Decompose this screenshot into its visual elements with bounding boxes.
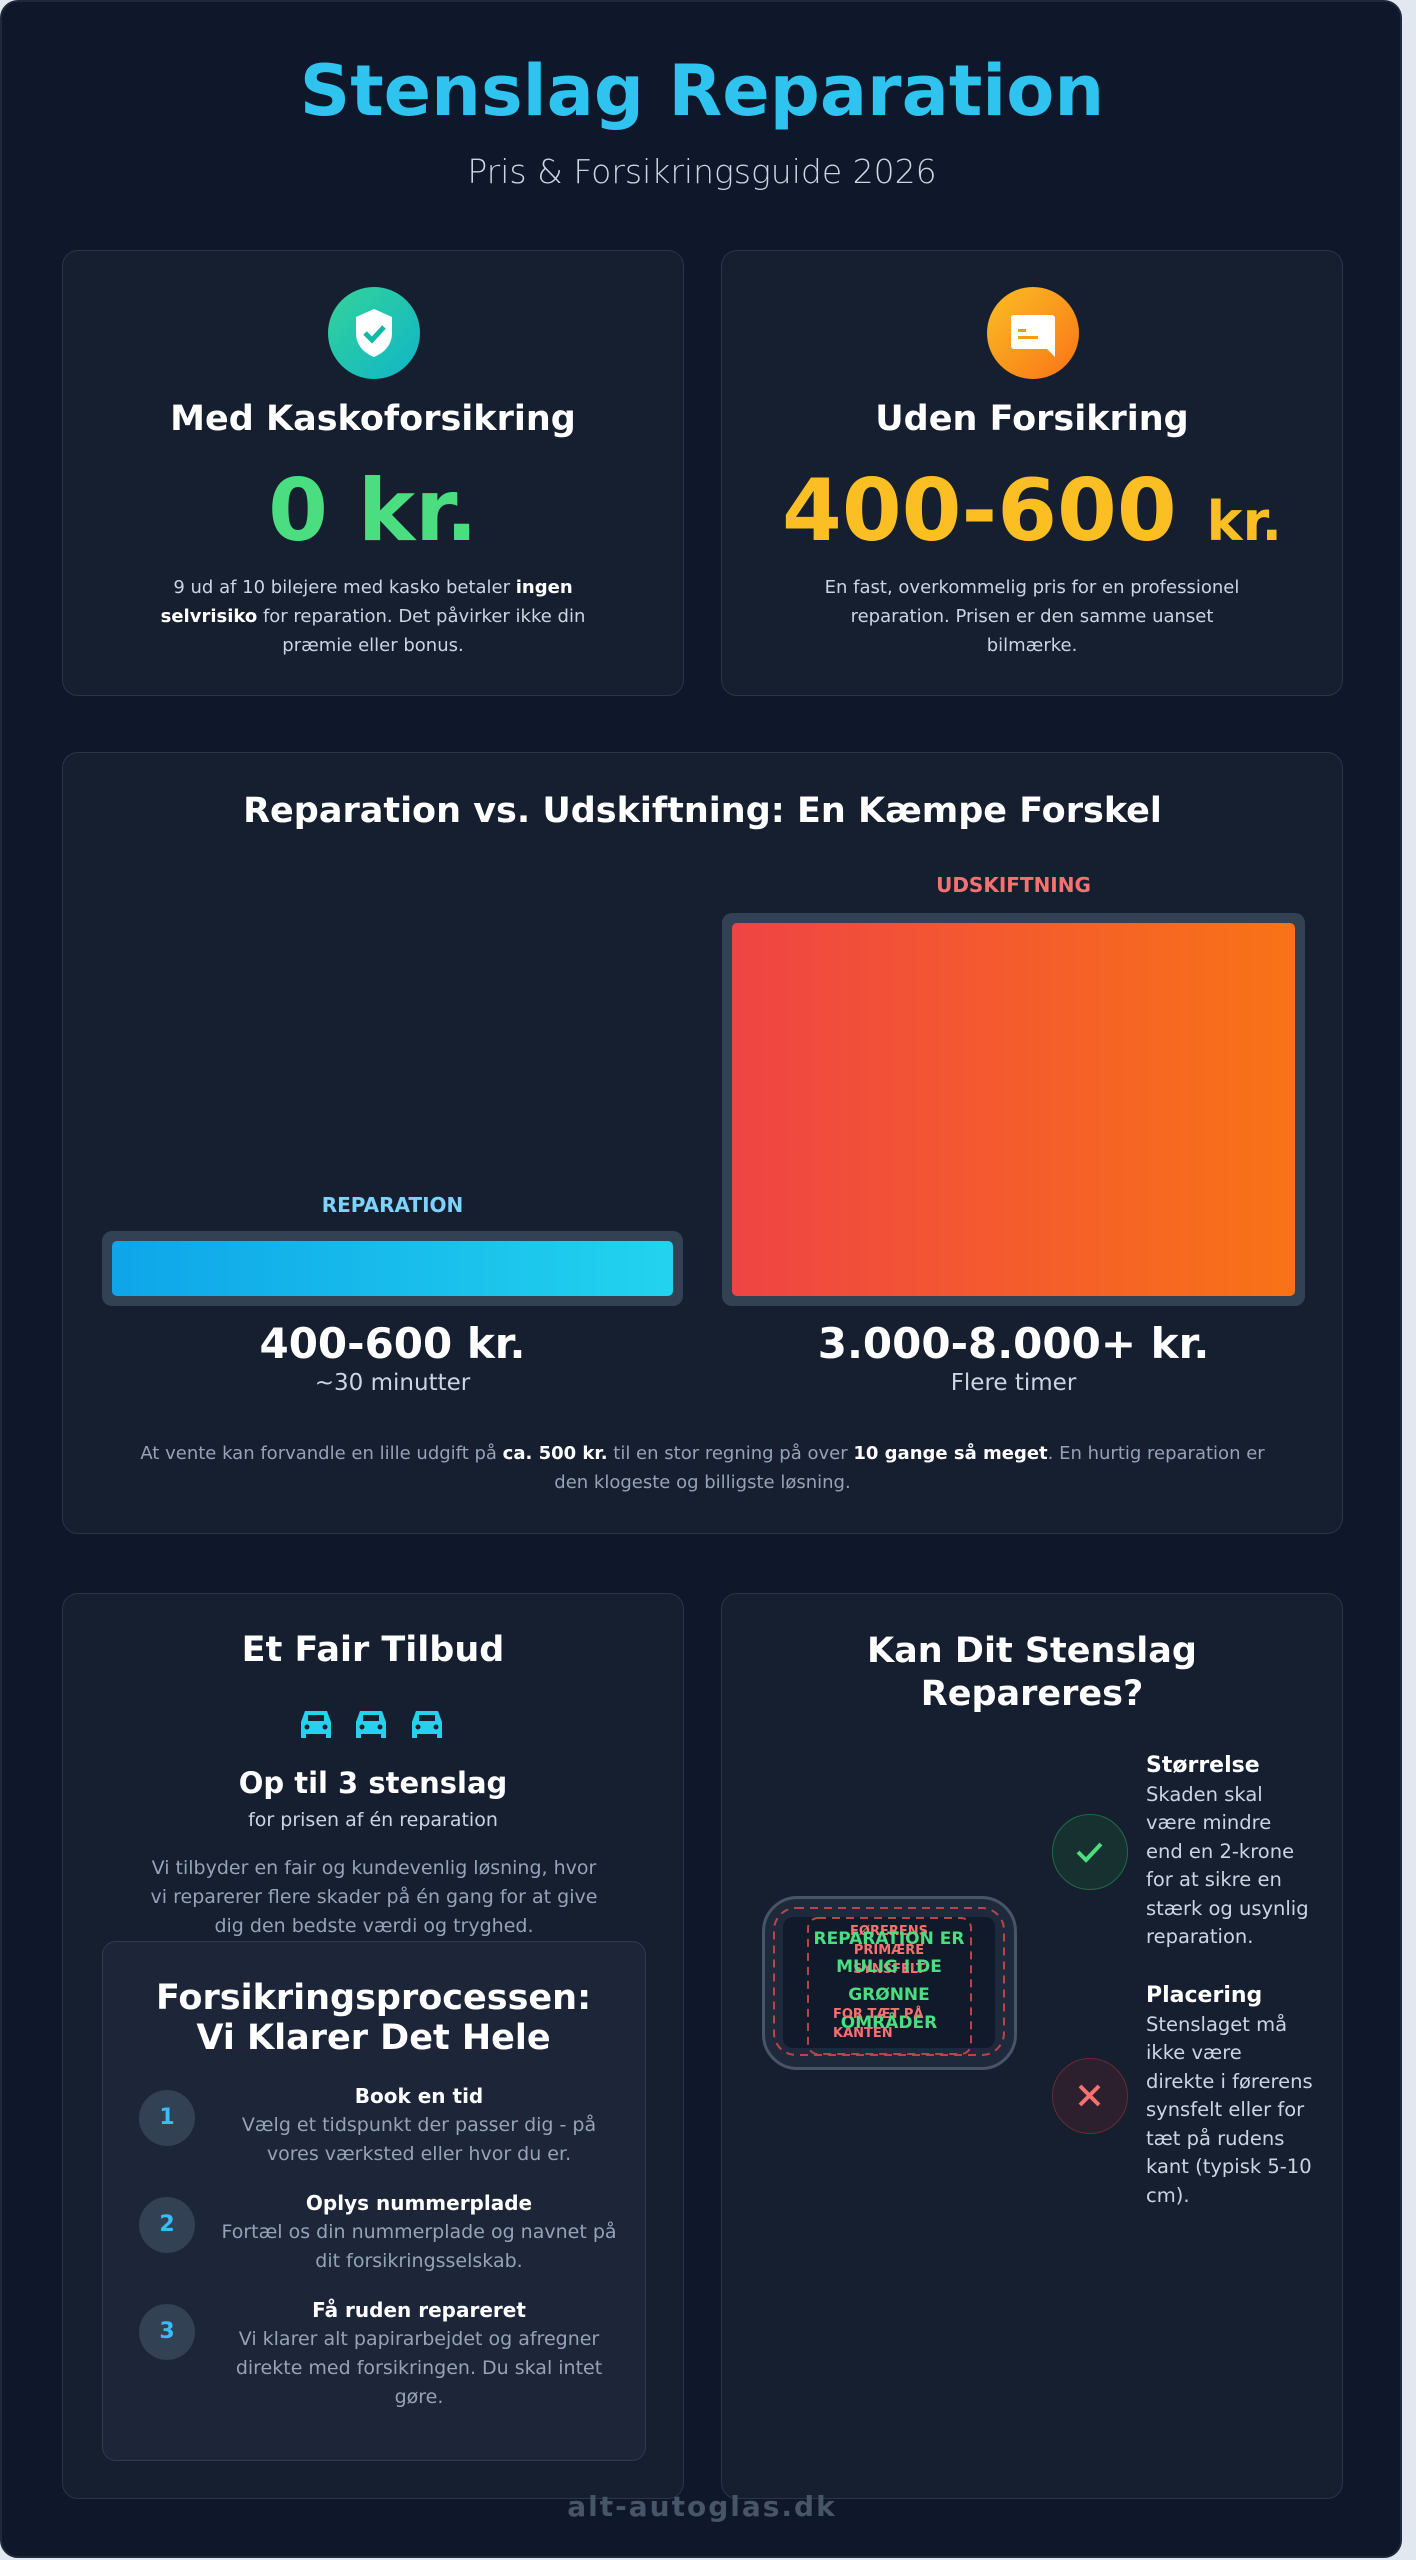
description: 9 ud af 10 bilejere med kasko betaler ingen selvrisiko for reparation. Det påvirker ikke din præmie eller bonus. (161, 577, 585, 656)
windshield diagram: REPARATION ER (814, 1929, 964, 1949)
step 3: Vi klarer alt papirarbejdet og afregner direkte med forsikringen. Du skal intet gøre. (236, 2328, 602, 2408)
value: reparation: ~30 minutter (315, 1370, 470, 1396)
price: 400-600 kr. (782, 461, 1282, 561)
text: placement: Placering (1146, 1983, 1262, 2008)
title: Stenslag Reparation (300, 50, 1104, 132)
value: udskiftning: 3.000-8.000+ kr. (818, 1319, 1209, 1368)
step 1: 1 (159, 2105, 175, 2130)
value: udskiftning: Flere timer (951, 1370, 1076, 1396)
panel: with insurance (62, 250, 684, 696)
panel: without insurance (721, 250, 1343, 696)
step 1: Book en tid (355, 2084, 483, 2108)
step 2: Fortæl os din nummerplade og navnet på dit forsikringsselskab. (221, 2221, 617, 2272)
value: reparation: 400-600 kr. (259, 1319, 526, 1368)
windshield diagram: MULIG I DE (836, 1957, 942, 1977)
windshield diagram: KANTEN (833, 2026, 893, 2041)
icon: cars (301, 1711, 442, 1738)
step 1: Vælg et tidspunkt der passer dig - på vores værksted eller hvor du er. (242, 2114, 596, 2165)
panel: comparison (62, 752, 1343, 1534)
panel: can it be repaired (721, 1593, 1343, 2499)
label: udskiftning: UDSKIFTNING (936, 873, 1091, 897)
windshield diagram: FOR TÆT PÅ (833, 2006, 923, 2022)
sub caption: for prisen af én reparation (248, 1809, 498, 1831)
bar: udskiftning (722, 913, 1305, 1306)
step 1 (139, 2084, 596, 2165)
subtitle: Pris & Forsikringsguide 2026 (467, 152, 937, 191)
heading: Vi Klarer Det Hele (196, 2018, 551, 2058)
step 2 (139, 2191, 617, 2272)
windshield diagram: GRØNNE (848, 1985, 930, 2005)
icon: receipt (987, 287, 1079, 379)
text: size: Skaden skal være mindre end en 2-krone for at sikre en stærk og usynlig reparation. (1146, 1782, 1309, 1948)
description: En fast, overkommelig pris for en professionel reparation. Prisen er den samme uanset bilmærke. (825, 577, 1239, 656)
windshield diagram: SYNSFELT (853, 1962, 925, 1977)
windshield diagram (762, 1896, 1017, 2070)
step 3: 3 (159, 2319, 175, 2344)
icon: check (1052, 1814, 1128, 1890)
heading (867, 1631, 1197, 1714)
label: reparation: REPARATION (322, 1193, 463, 1217)
subheading: Op til 3 stenslag (239, 1766, 507, 1800)
price: 0 kr. (268, 461, 478, 561)
icon: cross (1052, 2058, 1128, 2134)
step 2: 2 (159, 2212, 175, 2237)
bar: reparation (102, 1231, 683, 1306)
panel: insurance process (102, 1941, 646, 2461)
value: reparation (259, 1319, 526, 1396)
heading: Uden Forsikring (875, 399, 1189, 439)
heading: Et Fair Tilbud (242, 1630, 504, 1670)
step 3: Få ruden repareret (312, 2298, 526, 2322)
heading: Forsikringsprocessen: (156, 1978, 591, 2018)
value: udskiftning (818, 1319, 1209, 1396)
step 2: Oplys nummerplade (306, 2191, 532, 2215)
footnote: At vente kan forvandle en lille udgift på ca. 500 kr. til en stor regning på over 10 gange så meget. En hurtig reparation er den klogeste og billigste løsning. (140, 1443, 1265, 1493)
footer: alt-autoglas.dk (567, 2490, 837, 2523)
windshield diagram: OMRÅDER (841, 2010, 937, 2033)
heading (156, 1978, 591, 2058)
heading: Repareres? (921, 1674, 1143, 1714)
heading: Reparation vs. Udskiftning: En Kæmpe Forskel (243, 791, 1162, 831)
windshield diagram: FØRERENS (850, 1924, 928, 1939)
step 3 (139, 2298, 602, 2408)
panel: fair offer (62, 1593, 684, 2499)
heading: Kan Dit Stenslag (867, 1631, 1197, 1671)
text: size: Størrelse (1146, 1753, 1260, 1778)
windshield diagram: PRIMÆRE (854, 1943, 924, 1958)
description: Vi tilbyder en fair og kundevenlig løsning, hvor vi reparerer flere skader på én gang for at give dig den bedste værdi og tryghed. (151, 1857, 597, 1937)
icon: shield (328, 287, 420, 379)
heading: Med Kaskoforsikring (170, 399, 576, 439)
text: placement: Stenslaget må ikke være direkte i førerens synsfelt eller for tæt på rudens kant (typisk 5-10 cm). (1146, 2012, 1313, 2206)
